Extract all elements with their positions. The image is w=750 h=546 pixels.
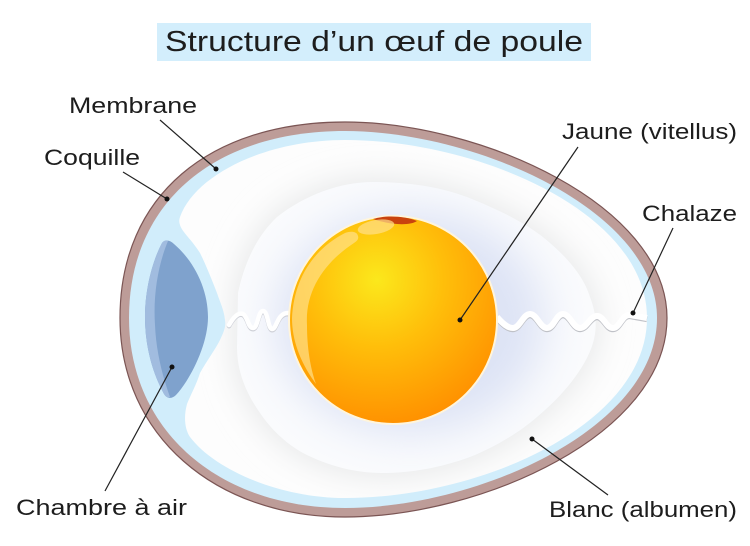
membrane: [129, 131, 657, 508]
label: Coquille: [44, 145, 170, 202]
chalaza right: [497, 314, 647, 329]
label: Chalaze: Chalaze: [642, 201, 737, 226]
label: Blanc (albumen): [530, 436, 737, 522]
albumen: [179, 140, 647, 498]
title: Structure d’un œuf de poule: [165, 26, 583, 58]
title: [157, 23, 591, 61]
label: Chalaze: [630, 201, 737, 316]
label: Jaune (vitellus): [458, 119, 737, 322]
egg: [120, 122, 667, 517]
shell: [120, 122, 667, 517]
inner albumen: [230, 175, 600, 480]
label: Membrane: Membrane: [69, 93, 197, 118]
air chamber: [145, 240, 208, 398]
label: Chambre à air: Chambre à air: [16, 495, 187, 520]
label: Chambre à air: [16, 364, 187, 520]
chalaza left: [229, 311, 288, 330]
label: Membrane: [69, 93, 218, 172]
label: Coquille: Coquille: [44, 145, 140, 170]
label: Jaune (vitellus): Jaune (vitellus): [562, 119, 737, 144]
label: Blanc (albumen): Blanc (albumen): [549, 497, 737, 522]
yolk: [289, 216, 497, 424]
